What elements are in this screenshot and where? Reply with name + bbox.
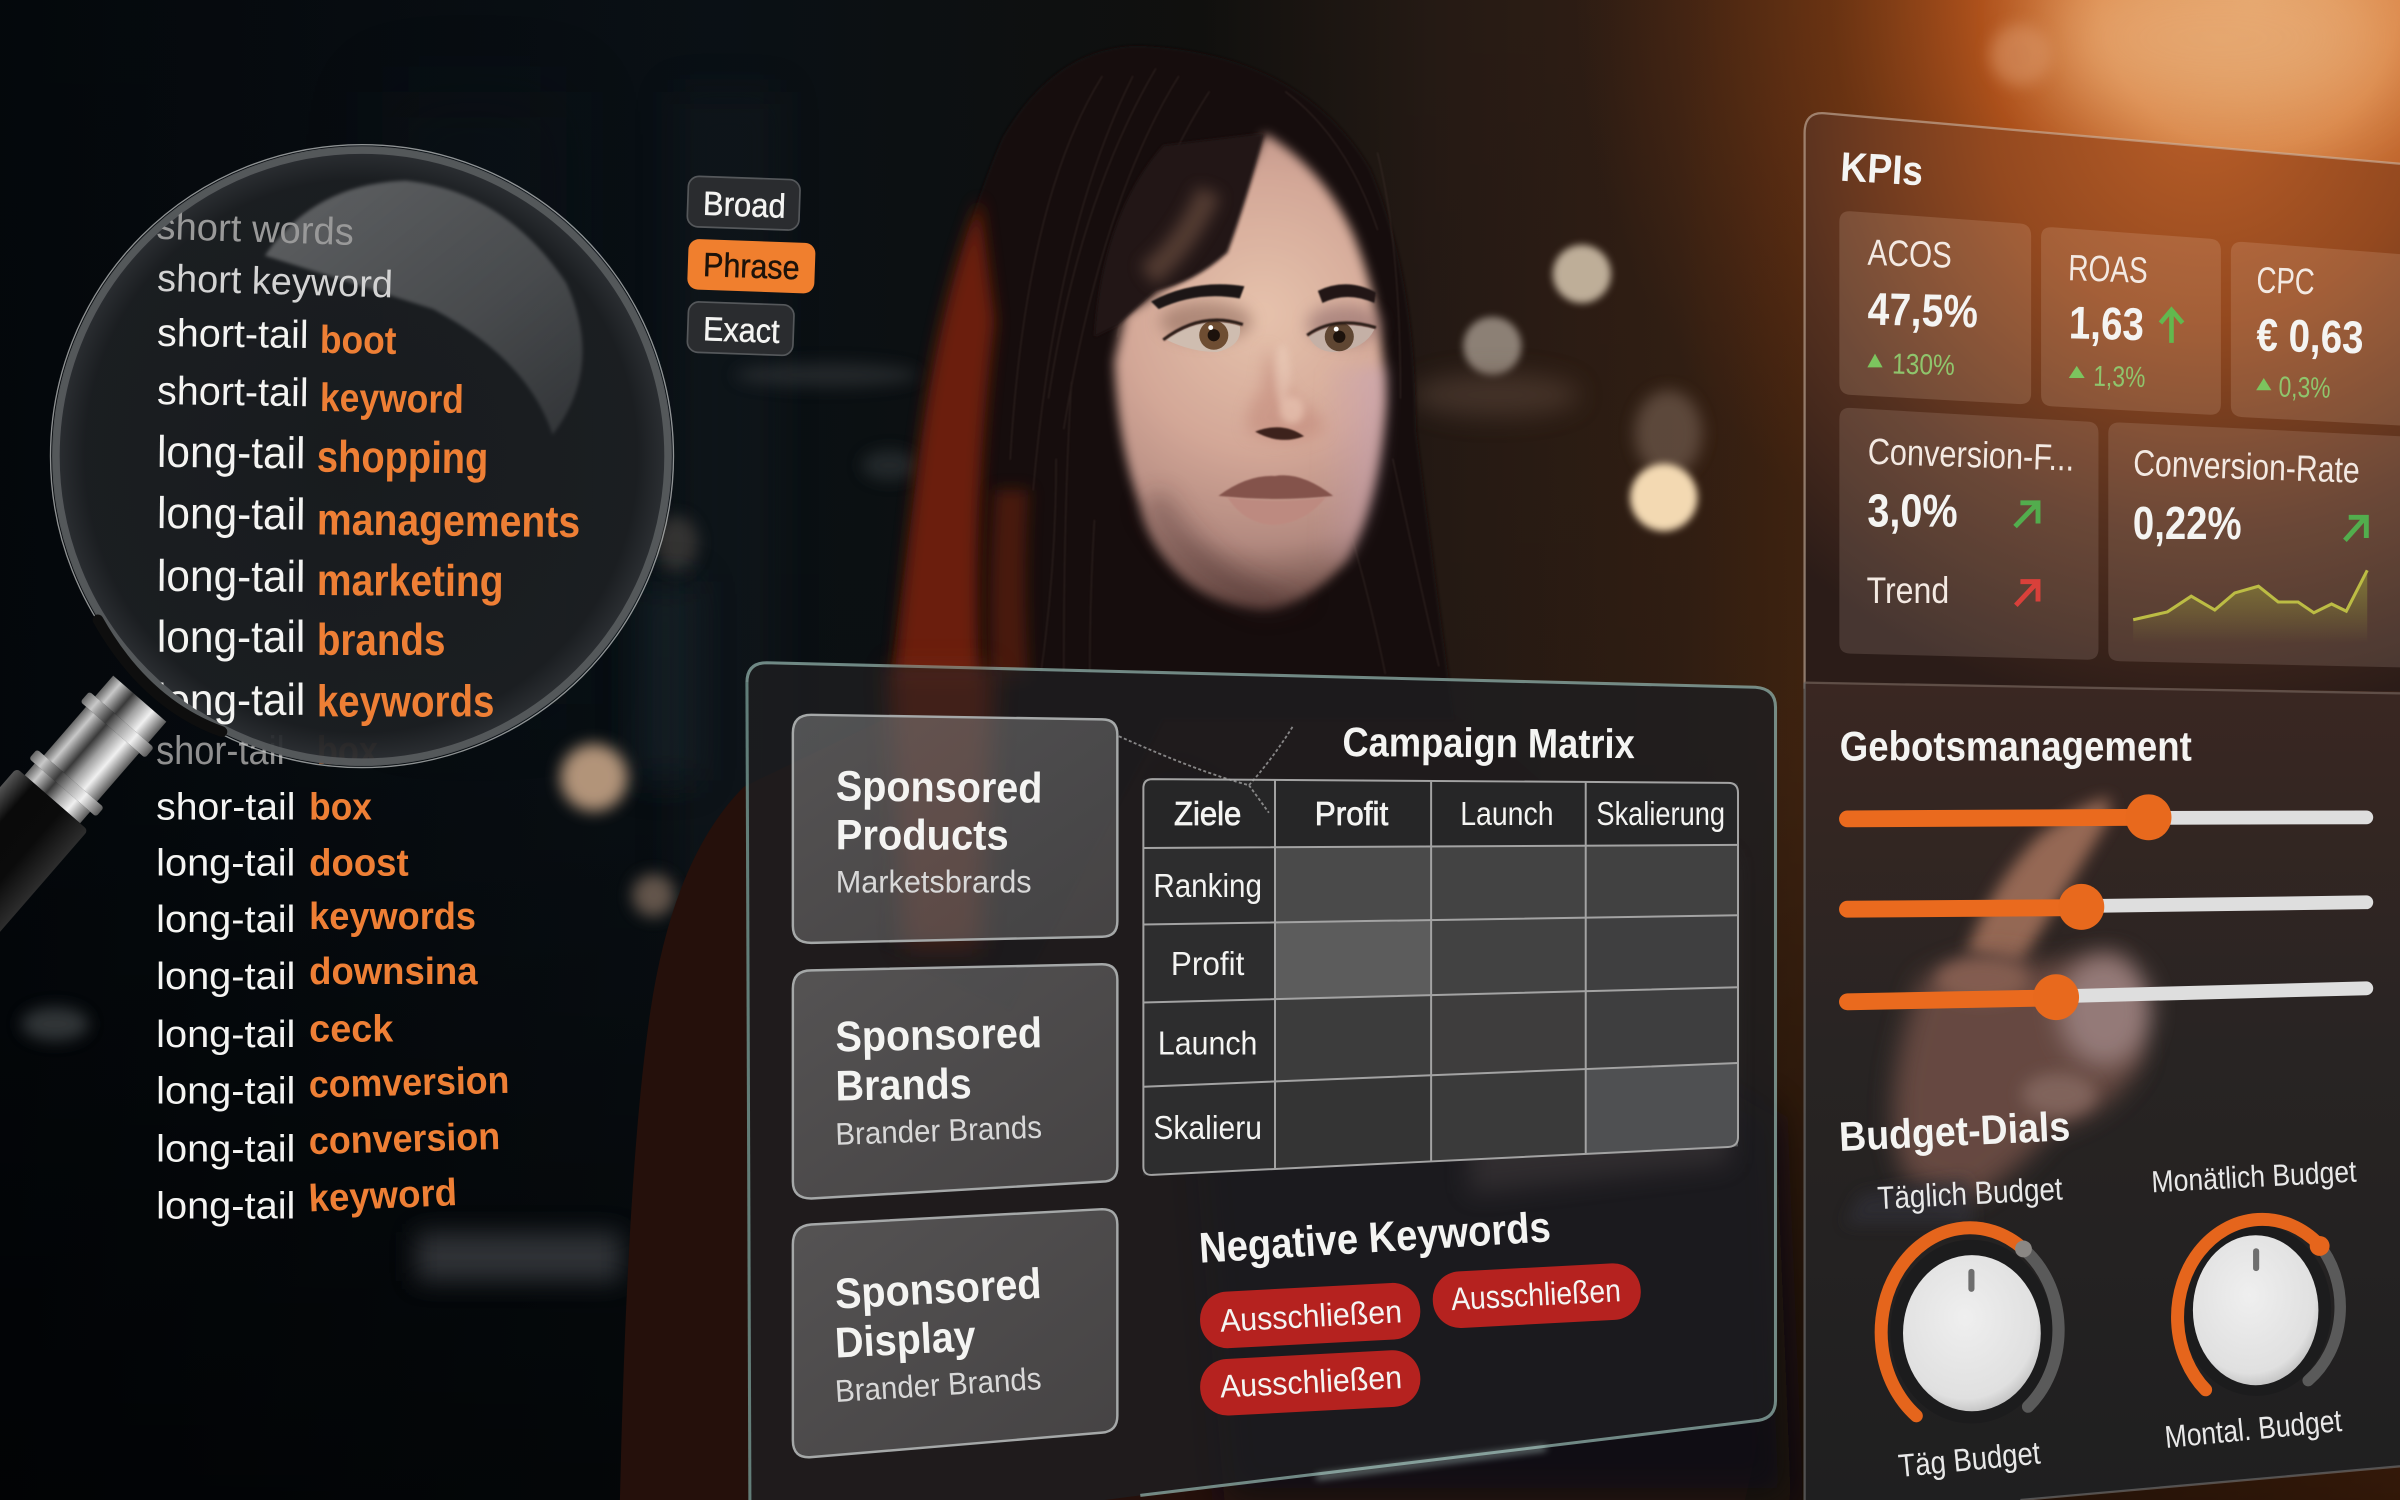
- section: KPIs: [1805, 113, 2400, 692]
- keyword: long-tail downsina: [156, 950, 478, 998]
- hand behind glass: [1844, 797, 2151, 1224]
- card: Sponsored Brands: [793, 964, 1117, 1198]
- keyword: hidden shor-tail: box: [317, 729, 378, 773]
- keyword list: [156, 729, 510, 1227]
- nose: [1247, 344, 1324, 441]
- card: Sponsored Products: [793, 715, 1117, 943]
- keyword: long-tail managements: managements: [317, 495, 580, 547]
- icon: arrow green: [2345, 517, 2366, 540]
- keyword: long-tail marketing: long-tail: [157, 552, 306, 602]
- row labels: Ranking: [1153, 868, 1262, 905]
- card: Sponsored Display: Brander Brands: [834, 1361, 1042, 1409]
- keyword: long-tail conversion: [156, 1115, 501, 1171]
- card: Conversion trend: Trend: [1867, 570, 1949, 611]
- column headers: Skalierung: [1596, 796, 1725, 833]
- pill: Ausschließen 3: [1199, 1349, 1422, 1417]
- card: Conversion trend: [1839, 408, 2098, 660]
- card: Sponsored Products: Marketsbrards: [836, 864, 1032, 899]
- keyword: hidden shor-tail: [156, 729, 378, 773]
- keyword: short-tail keyword: [158, 376, 462, 420]
- chip: Phrase: [687, 239, 816, 294]
- card: Conversion-Rate: [2108, 422, 2400, 667]
- keyword: long-tail shopping: long-tail: [157, 428, 306, 478]
- card: Sponsored Products: Products: [836, 811, 1009, 859]
- keyword: long-tail shopping: shopping: [317, 433, 489, 483]
- face: [1114, 133, 1385, 609]
- left column cells: [1143, 847, 1275, 1176]
- icon: arrow green: [2015, 503, 2038, 527]
- keyword: long-tail comversion: [156, 1059, 510, 1113]
- hair reflection: [888, 664, 1730, 1194]
- slider 2: [1847, 884, 2366, 930]
- neck: [1133, 551, 1423, 704]
- eyes: [1166, 322, 1240, 352]
- chip: Broad: [687, 176, 800, 230]
- pill: Ausschließen 1: [1199, 1282, 1422, 1350]
- card: CPC: 0,3%: [2278, 371, 2331, 405]
- row labels: Launch: [1158, 1026, 1257, 1063]
- lens rim: [56, 150, 668, 762]
- keyword: long-tail keywords: keywords: [317, 677, 494, 726]
- handle: [0, 668, 176, 1027]
- eyebrows: [1151, 284, 1244, 309]
- keyword: shor-tail box: shor-tail: [156, 786, 295, 829]
- eye sockets: [1160, 302, 1381, 344]
- magnifying glass: [0, 144, 674, 932]
- label: Monätlich Budget: Monätlich Budget: [2151, 1155, 2358, 1199]
- row labels: Skalieru: [1153, 1110, 1262, 1147]
- row labels: [1153, 868, 1262, 1147]
- keyword: long-tail brands: brands: [317, 616, 445, 665]
- keyword: long-tail brands: long-tail: [157, 613, 305, 662]
- body: sweater: [620, 673, 1768, 1500]
- card: Sponsored Display: Display: [834, 1312, 977, 1368]
- keyword: long-tail downsina: downsina: [309, 950, 478, 993]
- keyword: long-tail keyword: long-tail: [156, 1184, 295, 1227]
- card: ACOS: [1839, 211, 2031, 404]
- column headers: Launch: [1460, 796, 1554, 833]
- card: Sponsored Brands: Brander Brands: [835, 1110, 1042, 1152]
- keyword: short-tail boot: [158, 318, 396, 354]
- card: Conversion-Rate: 0,22%: [2133, 497, 2242, 549]
- lens highlight: [265, 181, 583, 435]
- chip: Exact: [687, 302, 794, 356]
- card: Conversion trend: Conversion-F...: [1867, 431, 2075, 479]
- label: Täglich Budget: Täglich Budget: [1877, 1171, 2063, 1216]
- keyword: long-tail doost: long-tail: [156, 842, 295, 885]
- dial: monthly budget: [2178, 1219, 2340, 1396]
- row labels: Profit: [1171, 946, 1245, 983]
- match type chips: [687, 176, 816, 356]
- keyword: long-tail shopping: [160, 434, 486, 483]
- panel: campaign glass: [747, 663, 1776, 1500]
- hair red streaks: [894, 199, 1029, 681]
- card: CPC: [2231, 242, 2400, 426]
- campaign matrix table: [1119, 726, 1738, 1176]
- pill: Ausschließen 1: Ausschließen: [1219, 1293, 1403, 1339]
- keyword: short-tail boot: boot: [320, 319, 397, 363]
- card: Sponsored Display: [793, 1209, 1117, 1457]
- keyword: shor-tail box: box: [309, 786, 372, 829]
- keyword: long-tail keywords: long-tail: [157, 676, 305, 725]
- bangs: [1094, 133, 1264, 337]
- card: Sponsored Display: Sponsored: [834, 1260, 1043, 1319]
- keyword: long-tail keywords: keywords: [309, 895, 476, 938]
- keyword: long-tail conversion: long-tail: [156, 1128, 295, 1171]
- lens glass: [53, 147, 671, 765]
- header cells: [1143, 779, 1738, 848]
- keyword: shor-tail box: [156, 786, 372, 829]
- column headers: Profit: [1315, 796, 1389, 833]
- keyword: long-tail brands: [160, 620, 444, 662]
- chip: Phrase: Phrase: [703, 247, 800, 287]
- keyword: hidden shor-tail: shor-tail: [156, 729, 285, 773]
- table grid: [1143, 779, 1738, 1175]
- card: ROAS: 1,63: [2068, 296, 2145, 350]
- pill: Ausschließen 3: Ausschließen: [1219, 1359, 1403, 1405]
- keyword: long-tail doost: doost: [309, 842, 409, 885]
- card: ACOS: 130%: [1892, 348, 1955, 382]
- heading: Gebotsmanagement: Gebotsmanagement: [1840, 724, 2192, 770]
- keyword: short words: short words: [156, 205, 355, 254]
- column headers: Ziele: [1174, 796, 1241, 833]
- keyword: long-tail comversion: long-tail: [156, 1070, 295, 1113]
- keyword: long-tail keyword: [156, 1171, 458, 1227]
- pill: Ausschließen 2: [1431, 1262, 1642, 1329]
- dial: daily budget: [1881, 1228, 2059, 1423]
- heading: Campaign Matrix: Campaign Matrix: [1342, 719, 1635, 767]
- slider 3: [1847, 974, 2366, 1020]
- label: Täg Budget: Täg Budget: [1897, 1435, 2042, 1484]
- sparkline: [2133, 570, 2367, 643]
- card: CPC: € 0,63: [2256, 309, 2364, 363]
- matrix cells: [1275, 845, 1738, 1169]
- keyword: long-tail keywords: [156, 895, 476, 941]
- card: ROAS: ROAS: [2068, 247, 2149, 291]
- keyword: short-tail keyword: keyword: [320, 376, 464, 422]
- keyword: long-tail comversion: comversion: [308, 1059, 510, 1106]
- card: CPC: CPC: [2256, 259, 2315, 302]
- keyword: short keyword: short keyword: [157, 257, 393, 306]
- card: Sponsored Brands: Brands: [835, 1060, 972, 1111]
- keyword: long-tail marketing: [160, 558, 502, 606]
- card: Conversion trend: 3,0%: [1867, 485, 1958, 537]
- card: Sponsored Brands: Sponsored: [835, 1009, 1043, 1062]
- keyword: long-tail doost: [156, 842, 409, 885]
- slider 1: [1847, 794, 2366, 840]
- lips: [1218, 475, 1333, 499]
- column headers: [1174, 796, 1725, 833]
- keyword: short-tail keyword: short-tail: [157, 369, 309, 415]
- keyword: long-tail downsina: long-tail: [156, 955, 295, 998]
- keyword: short-tail boot: short-tail: [157, 312, 309, 357]
- card: ROAS: [2041, 227, 2221, 415]
- card: Sponsored Products: Sponsored: [836, 763, 1043, 813]
- keyword: long-tail ceck: [156, 1008, 394, 1056]
- keyword: long-tail ceck: ceck: [309, 1008, 394, 1051]
- hair strands: [1010, 69, 1439, 673]
- card: ACOS: 47,5%: [1867, 283, 1979, 337]
- keyword: long-tail keyword: keyword: [308, 1171, 458, 1220]
- heading: KPIs: KPIs: [1839, 144, 1924, 194]
- necklace: [1119, 726, 1293, 813]
- icon: arrow red: [2016, 582, 2038, 605]
- heading: Budget-Dials: Budget-Dials: [1838, 1103, 2071, 1160]
- keyword: long-tail keywords: long-tail: [156, 898, 295, 941]
- hair back: [880, 46, 1454, 1010]
- card: ACOS: ACOS: [1867, 232, 1953, 276]
- chip: Broad: Broad: [702, 186, 786, 226]
- keyword: long-tail conversion: conversion: [308, 1115, 501, 1163]
- keyword: long-tail ceck: long-tail: [156, 1013, 295, 1056]
- pill: Ausschließen 2: Ausschließen: [1450, 1272, 1622, 1317]
- panel: controls right: [1805, 113, 2400, 1500]
- person: woman in dark turtleneck: [620, 46, 1791, 1500]
- heading: Negative Keywords: Negative Keywords: [1198, 1203, 1552, 1273]
- keywords in lens: [156, 205, 580, 726]
- card: ROAS: 1,3%: [2093, 361, 2146, 394]
- label: Montal. Budget: Montal. Budget: [2163, 1403, 2343, 1455]
- keyword: long-tail keywords: [160, 682, 493, 726]
- chip: Exact: Exact: [702, 311, 781, 351]
- keyword: long-tail managements: long-tail: [157, 489, 306, 540]
- icon: arrow up: [2160, 310, 2183, 343]
- keyword: long-tail managements: [160, 496, 578, 545]
- keyword: long-tail marketing: marketing: [317, 556, 504, 606]
- section: controls: [1805, 683, 2400, 1500]
